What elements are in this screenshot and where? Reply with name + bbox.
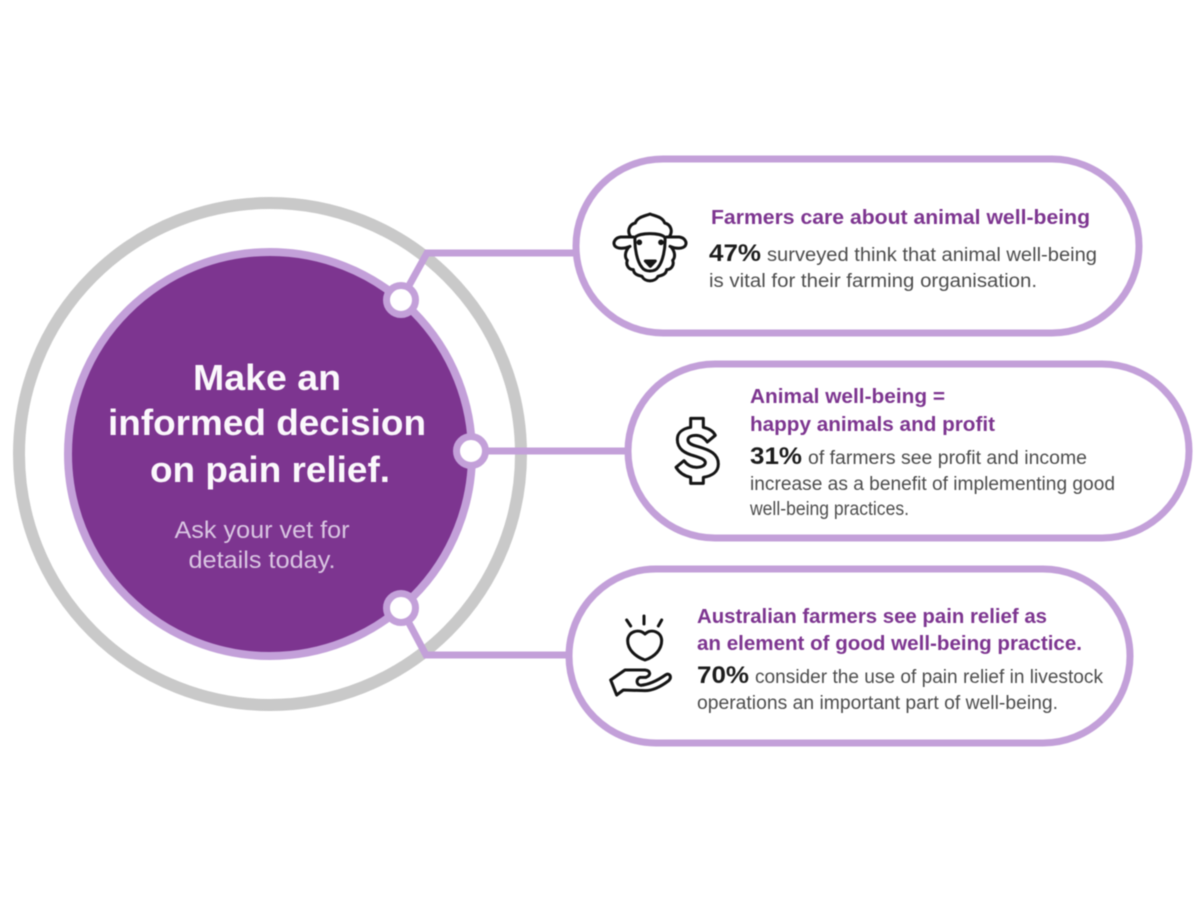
text: heading: Farmers care about animal well-being [711,207,1090,229]
text: statistic [709,240,1097,292]
icon: heart in hand [611,616,670,695]
central heading [108,357,426,490]
text: statistic [749,443,1115,520]
connector node: bottom [386,594,416,622]
text: statistic: 70% [697,662,749,689]
text: statistic: 31% [750,443,802,470]
text: statistic: increase as a benefit of implementing good [750,474,1115,495]
text: heading [750,386,995,436]
central subtext: Ask your vet for [174,517,350,544]
text: statistic: 47% [709,240,761,267]
icon: dollar sign [676,418,718,483]
icon: sheep [614,214,686,281]
text: heading: Australian farmers see pain relief as [697,606,1047,628]
connector node: top [386,286,416,314]
text: statistic: is vital for their farming organisation. [709,271,1037,292]
connector lines [401,253,630,655]
text: statistic: surveyed think that animal well-being [767,245,1097,266]
text: heading: Animal well-being = [750,386,945,408]
central purple circle [68,252,472,656]
connector node: middle [456,436,486,466]
panel: pain relief [569,569,1130,743]
text: statistic: well-being practices. [749,499,909,520]
central heading: informed decision [108,402,426,443]
text: statistic [697,662,1103,714]
central subtext [174,517,350,574]
panel: profit [628,364,1189,538]
text: statistic: consider the use of pain relief in livestock [755,667,1103,688]
central heading: on pain relief. [150,449,390,490]
text: heading: happy animals and profit [750,414,995,436]
text: heading [697,606,1082,655]
outer grey ring [19,203,521,705]
text: statistic: of farmers see profit and income [808,448,1087,469]
text: heading: an element of good well-being practice. [697,633,1082,655]
central subtext: details today. [188,547,336,574]
panel: animal well-being [576,159,1139,333]
text: statistic: operations an important part of well-being. [697,693,1058,714]
central heading: Make an [193,357,341,398]
